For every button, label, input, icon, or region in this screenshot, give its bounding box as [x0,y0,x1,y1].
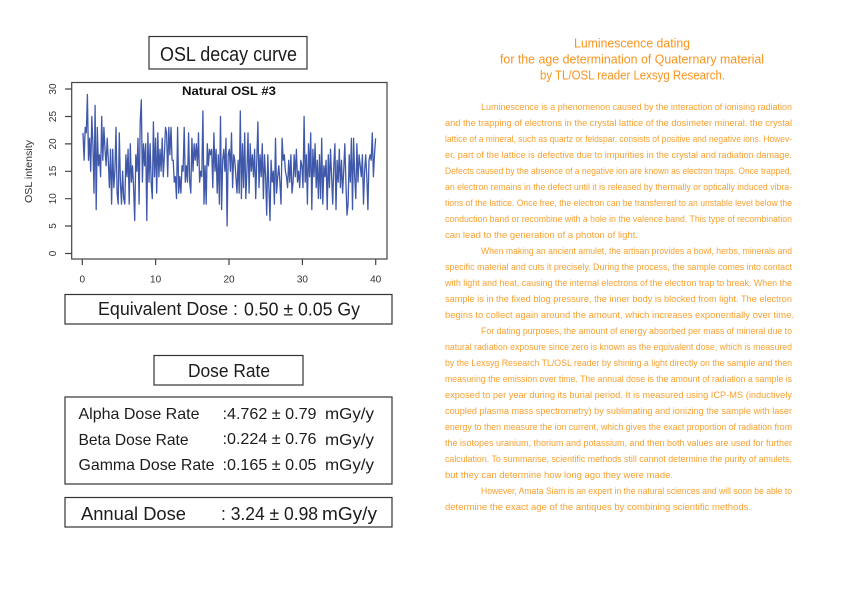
paragraph: dating purposes: coupled plasma mass spectrometry) by sublimating and ionizing the sample with laser [445,406,793,417]
result box: equivalent dose: 0.50 ± 0.05 Gy [244,298,361,320]
paragraph: what luminescence is: can lead to the generation of a photon of light. [445,230,638,241]
x axis ticks and labels: 10 [150,274,162,286]
paragraph: amulet making [444,246,794,321]
row: gamma dose rate [78,457,374,474]
y axis ticks and labels: 30 [48,83,59,95]
y axis ticks and labels [48,83,72,256]
article title: for the age determination of Quaternary material [500,52,764,66]
chart title: Natural OSL #3 [182,84,276,98]
paragraph: what luminescence is [445,102,792,241]
paragraph: dating purposes: measuring the emission over time. The annual dose is the amount of radiation a sample is [445,374,792,385]
paragraph: dating purposes: the isotopes uranium, thorium and potassium, and then both values are used for further [445,438,793,449]
row: beta dose rate: mGy/y [325,432,374,449]
y axis ticks and labels: 25 [48,111,59,122]
row: alpha dose rate: mGy/y [325,406,374,423]
x axis ticks and labels: 40 [370,274,382,286]
paragraph: dating purposes: For dating purposes, the amount of energy absorbed per mass of mineral due to [481,326,792,337]
paragraph: dating purposes: natural radiation exposure since zero is known as the equivalent dose, which is measured [445,342,792,353]
paragraph: what luminescence is: Defects caused by the absence of a negative ion are known as electron traps. Once trapped, [445,166,792,177]
paragraph: dating purposes: exposed to per year during its burial period. It is measured using ICP-MS (inductively [445,390,792,401]
paragraph: amulet making: sample is in the fixed blog pressure, the inner body is blocked from light. The electron [445,294,792,305]
row: beta dose rate: :0.224 ± 0.76 [222,431,317,448]
result box: annual dose: : 3.24 ± 0.98 [221,503,318,524]
line chart: Natural OSL #3 [24,82,387,286]
chart frame [72,82,387,259]
row: alpha dose rate: :4.762 ± 0.79 [222,406,317,423]
paragraph: amulet making: specific material and cuts it precisely. During the process, the sample comes into contact [445,262,792,273]
y axis ticks and labels: 20 [48,138,59,149]
result box: annual dose: mGy/y [322,503,378,524]
row: beta dose rate [78,431,374,449]
row: gamma dose rate: Gamma Dose Rate [78,457,215,474]
x axis ticks and labels: 30 [297,274,308,286]
y axis ticks and labels: 15 [48,165,59,177]
paragraph: what luminescence is: an electron remains in the defect until it is released by thermally or optically induced vibra- [445,182,792,193]
x axis ticks and labels [80,259,382,286]
y axis ticks and labels: 5 [48,223,59,229]
paragraph: what luminescence is: Luminescence is a phenomenon caused by the interaction of ionising radiation [481,102,792,113]
paragraph: what luminescence is: lattice of a mineral, such as quartz or feldspar, consists of positive and negative ions. Howev- [445,134,792,145]
paragraph: Amata Siam [445,486,792,513]
paragraph: amulet making: begins to collect again around the amount, which increases exponentially over time. [445,310,794,321]
y axis ticks and labels: 0 [48,250,59,256]
data line [83,94,376,226]
row: alpha dose rate: Alpha Dose Rate [78,406,200,423]
heading box: dose rate: Dose Rate [188,361,270,381]
result box: equivalent dose: Equivalent Dose : [98,298,238,319]
paragraph: dating purposes: by the Lexsyg Research TL/OSL reader by shining a light directly on the sample and then [445,358,792,369]
paragraph: what luminescence is: er, part of the lattice is defective due to impurities in the crystal and radiation damage. [445,150,792,161]
paragraph: dating purposes [445,326,793,481]
result box: annual dose [65,498,392,527]
x axis ticks and labels: 20 [223,274,235,286]
paragraph: amulet making: with light and heat, causing the internal electrons of the electron trap to break. When the [444,278,792,289]
heading box: OSL decay curve [149,36,307,69]
paragraph: Amata Siam: determine the exact age of the antiques by combining scientific methods. [445,502,751,513]
article title: by TL/OSL reader Lexsyg Research. [540,68,725,82]
row: gamma dose rate: :0.165 ± 0.05 [222,457,317,474]
heading box: OSL decay curve: OSL decay curve [160,44,297,66]
paragraph: what luminescence is: and the trapping of electrons in the crystal lattice of the dosimeter mineral. the crystal [445,118,792,129]
article title [500,36,764,82]
row: gamma dose rate: mGy/y [325,457,374,474]
row: beta dose rate: Beta Dose Rate [78,432,189,449]
result box: annual dose: Annual Dose [81,503,186,524]
y axis ticks and labels: 10 [48,193,59,204]
row: alpha dose rate [78,406,374,423]
x axis ticks and labels: 0 [80,274,86,286]
paragraph: dating purposes: but they can determine how long ago they were made. [445,470,673,481]
paragraph: dating purposes: energy to then measure the ion current, which gives the exact proportion of radiation from [445,422,792,433]
y axis title: OSL intensity [24,140,35,203]
paragraph: Amata Siam: However, Amata Siam is an expert in the natural sciences and will soon be able to [481,486,792,497]
paragraph: amulet making: When making an ancient amulet, the artisan provides a bowl, herbs, minerals and [481,246,792,257]
panel: dose rates [65,397,392,484]
paragraph: dating purposes: calculation. To summarise, scientific methods still cannot determine the purity of amulets, [445,454,792,465]
result box: equivalent dose [65,294,392,324]
heading box: dose rate [154,356,303,385]
article title: Luminescence dating [574,36,690,50]
article body text [444,102,794,513]
paragraph: what luminescence is: conduction band or recombine with a hole in the valence band. This type of recombination [445,214,792,225]
paragraph: what luminescence is: tions of the lattice. Once free, the electron can be transferred to an unstable level below the [445,198,792,209]
